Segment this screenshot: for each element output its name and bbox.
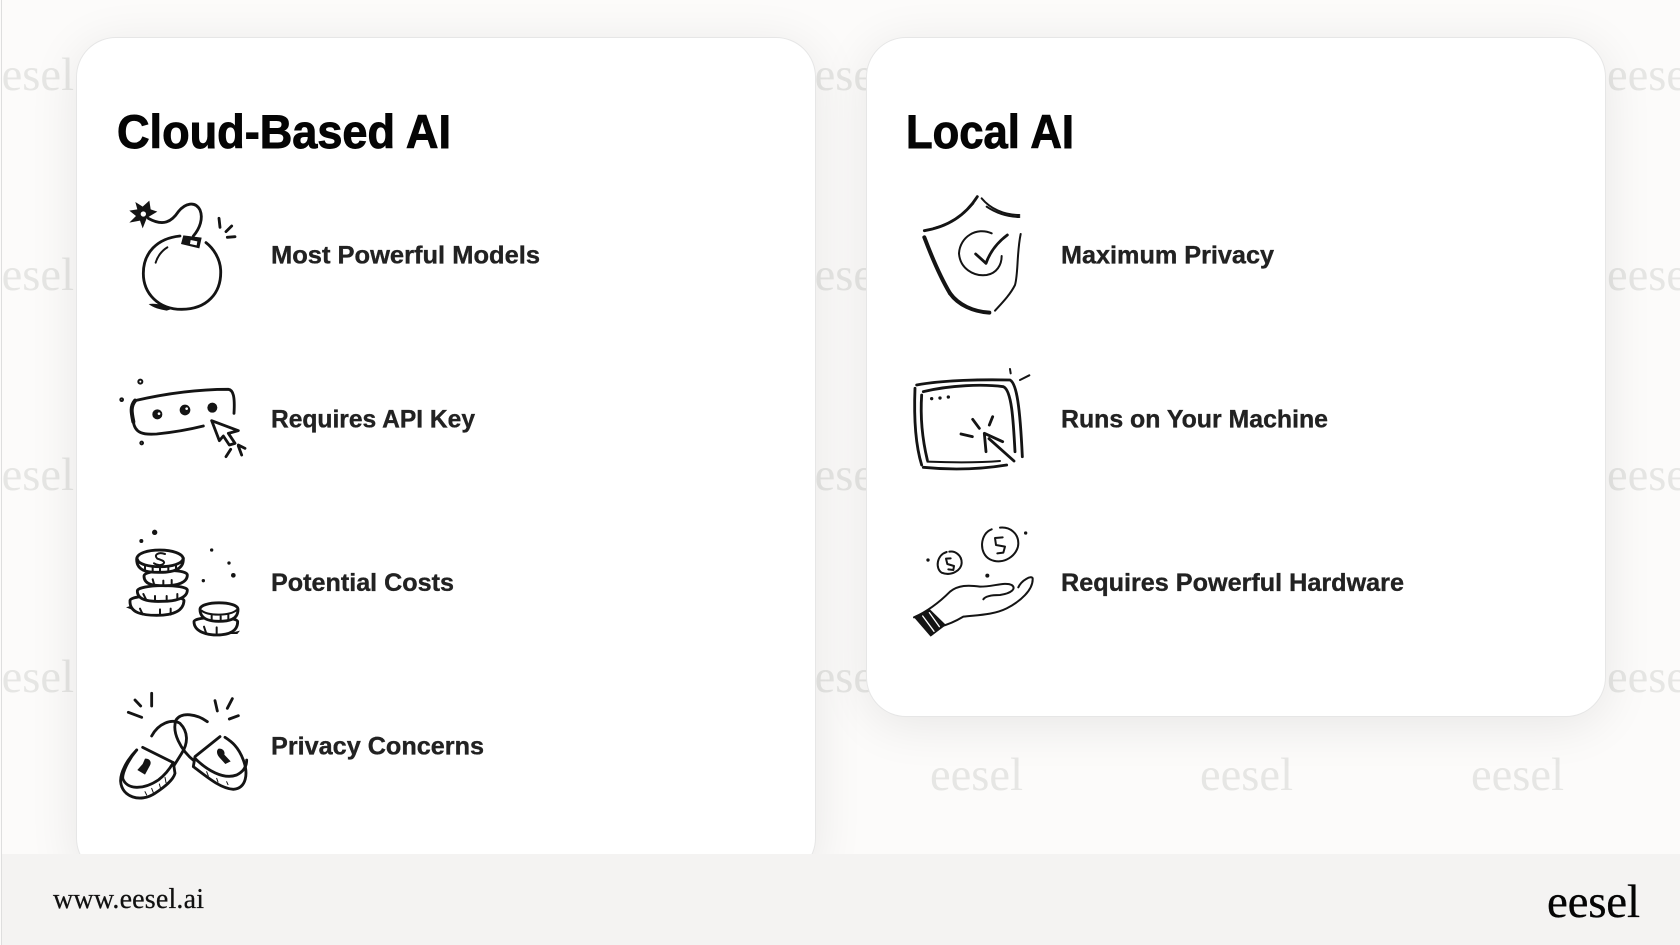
footer bar xyxy=(2,854,1680,945)
background watermarks: eesel xyxy=(794,450,887,501)
left edge line xyxy=(1,0,2,945)
icon: hand with coins xyxy=(914,528,1033,637)
label: Requires Powerful Hardware: Requires Powerful Hardware xyxy=(1061,569,1404,597)
label: Maximum Privacy: Maximum Privacy xyxy=(1061,242,1274,270)
background watermarks: eesel xyxy=(794,652,887,703)
label: Most Powerful Models: Most Powerful Models xyxy=(271,242,540,270)
icon: key input with cursor xyxy=(120,380,245,457)
icon: shield with check xyxy=(924,197,1021,313)
eesel logo: eesel xyxy=(1547,876,1640,928)
label: Potential Costs: Potential Costs xyxy=(271,569,454,597)
background watermarks: eesel xyxy=(1200,750,1293,801)
icon: screen with cursor xyxy=(915,369,1029,469)
panel: Local AI xyxy=(866,37,1606,717)
icon: coin stacks xyxy=(126,530,240,635)
background watermarks: eesel xyxy=(794,250,887,301)
icon: bomb xyxy=(129,201,235,311)
background watermarks: eesel xyxy=(1471,750,1564,801)
heading: Local AI: Local AI xyxy=(906,105,1074,158)
background watermarks: eesel xyxy=(794,50,887,101)
label: Privacy Concerns: Privacy Concerns xyxy=(271,732,484,760)
label: Requires API Key: Requires API Key xyxy=(271,406,475,434)
heading: Cloud-Based AI: Cloud-Based AI xyxy=(117,105,451,158)
icon: locked mice with tangled cables xyxy=(121,693,247,798)
background watermarks: eesel xyxy=(930,750,1023,801)
label: Runs on Your Machine: Runs on Your Machine xyxy=(1061,406,1328,434)
panel: Cloud-Based AI xyxy=(76,37,816,878)
footer url: www.eesel.ai xyxy=(53,884,204,915)
